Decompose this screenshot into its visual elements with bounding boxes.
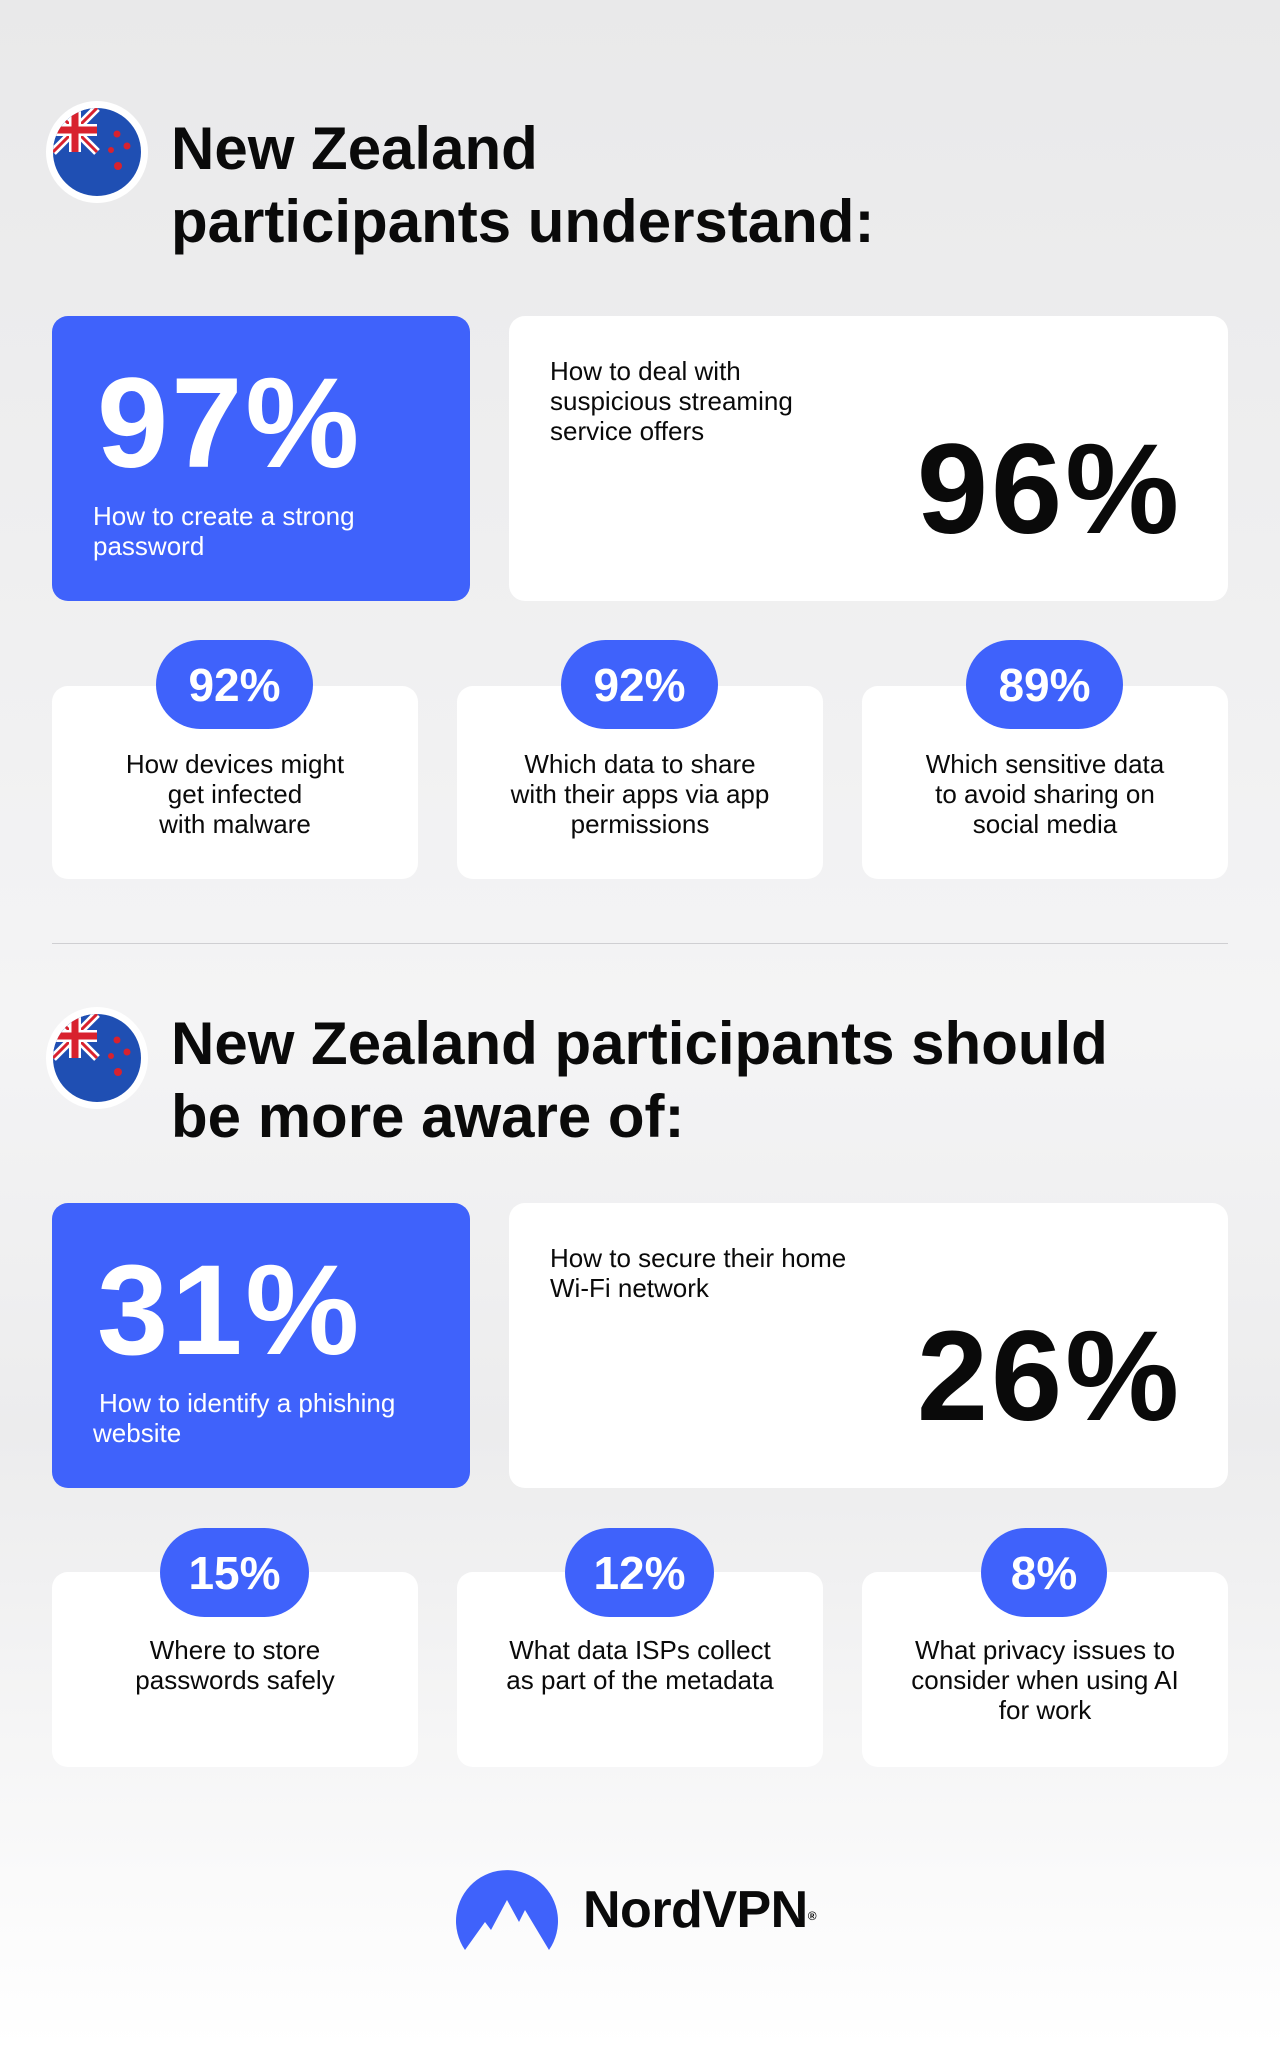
card: 96%: How to deal with	[550, 356, 741, 386]
card: 12%	[457, 1572, 823, 1767]
card: 12%: as part of the metadata	[506, 1665, 774, 1695]
wordmark: NordVPN®	[583, 1881, 816, 1939]
pill 12%: 12%	[593, 1546, 686, 1598]
card: 31%: 31%	[97, 1239, 362, 1382]
card: 92% permissions: Which data to share	[524, 749, 756, 779]
card: 31%	[52, 1203, 470, 1488]
card: 92% permissions	[457, 686, 823, 879]
pill 8%: 8%	[1011, 1546, 1077, 1598]
pill 92%	[156, 640, 313, 729]
card: 26%: Wi-Fi network	[550, 1273, 709, 1303]
card: 92% malware: with malware	[159, 809, 311, 839]
card: 92% permissions: permissions	[571, 809, 709, 839]
card: 92% permissions: with their apps via app	[511, 779, 769, 809]
pill 89%: 89%	[998, 658, 1091, 710]
card: 8%: consider when using AI	[911, 1665, 1179, 1695]
card: 96%: service offers	[550, 416, 704, 446]
pill 12%	[565, 1528, 714, 1617]
logo	[456, 1870, 816, 1950]
pill 8%	[981, 1528, 1107, 1617]
card: 89%: Which sensitive data	[926, 749, 1164, 779]
card: 15%: passwords safely	[135, 1665, 335, 1695]
card: 12%: What data ISPs collect	[509, 1635, 771, 1665]
card: 92% malware: How devices might	[126, 749, 344, 779]
card: 97%: password	[93, 531, 204, 561]
card: 26%	[509, 1203, 1228, 1488]
title 2	[171, 1010, 1108, 1150]
card: 97%: How to create a strong	[93, 501, 355, 531]
flag icon 2	[46, 1007, 148, 1109]
title 1: participants understand:	[171, 188, 874, 255]
pill 15%	[160, 1528, 309, 1617]
card: 31%: website	[93, 1418, 181, 1448]
pill 15%: 15%	[188, 1546, 281, 1598]
card: 89%: to avoid sharing on	[935, 779, 1155, 809]
card: 31%: How to identify a phishing	[99, 1388, 395, 1418]
card: 97%: 97%	[97, 352, 362, 495]
card: 92% malware	[52, 686, 418, 879]
card: 96%: 96%	[917, 418, 1182, 561]
card: 8%	[862, 1572, 1228, 1767]
title 1	[171, 115, 874, 255]
card: 15%: Where to store	[150, 1635, 320, 1665]
title 1: New Zealand	[171, 115, 538, 182]
icon: nordvpn mountain	[456, 1870, 558, 1950]
card: 96%	[509, 316, 1228, 601]
card: 92% malware: get infected	[168, 779, 302, 809]
card: 26%: How to secure their home	[550, 1243, 846, 1273]
card: 89%: social media	[973, 809, 1117, 839]
card: 96%: suspicious streaming	[550, 386, 793, 416]
pill 92% b	[561, 640, 718, 729]
card: 15%	[52, 1572, 418, 1767]
card: 8%: for work	[999, 1695, 1091, 1725]
flag icon 1	[46, 101, 148, 203]
card: 89%	[862, 686, 1228, 879]
title 2: be more aware of:	[171, 1083, 684, 1150]
pill 92%: 92%	[188, 658, 281, 710]
card: 26%: 26%	[917, 1305, 1182, 1448]
card: 8%: What privacy issues to	[915, 1635, 1175, 1665]
card: 97%	[52, 316, 470, 601]
pill 89%	[966, 640, 1123, 729]
pill 92% b: 92%	[593, 658, 686, 710]
title 2: New Zealand participants should	[171, 1010, 1108, 1077]
